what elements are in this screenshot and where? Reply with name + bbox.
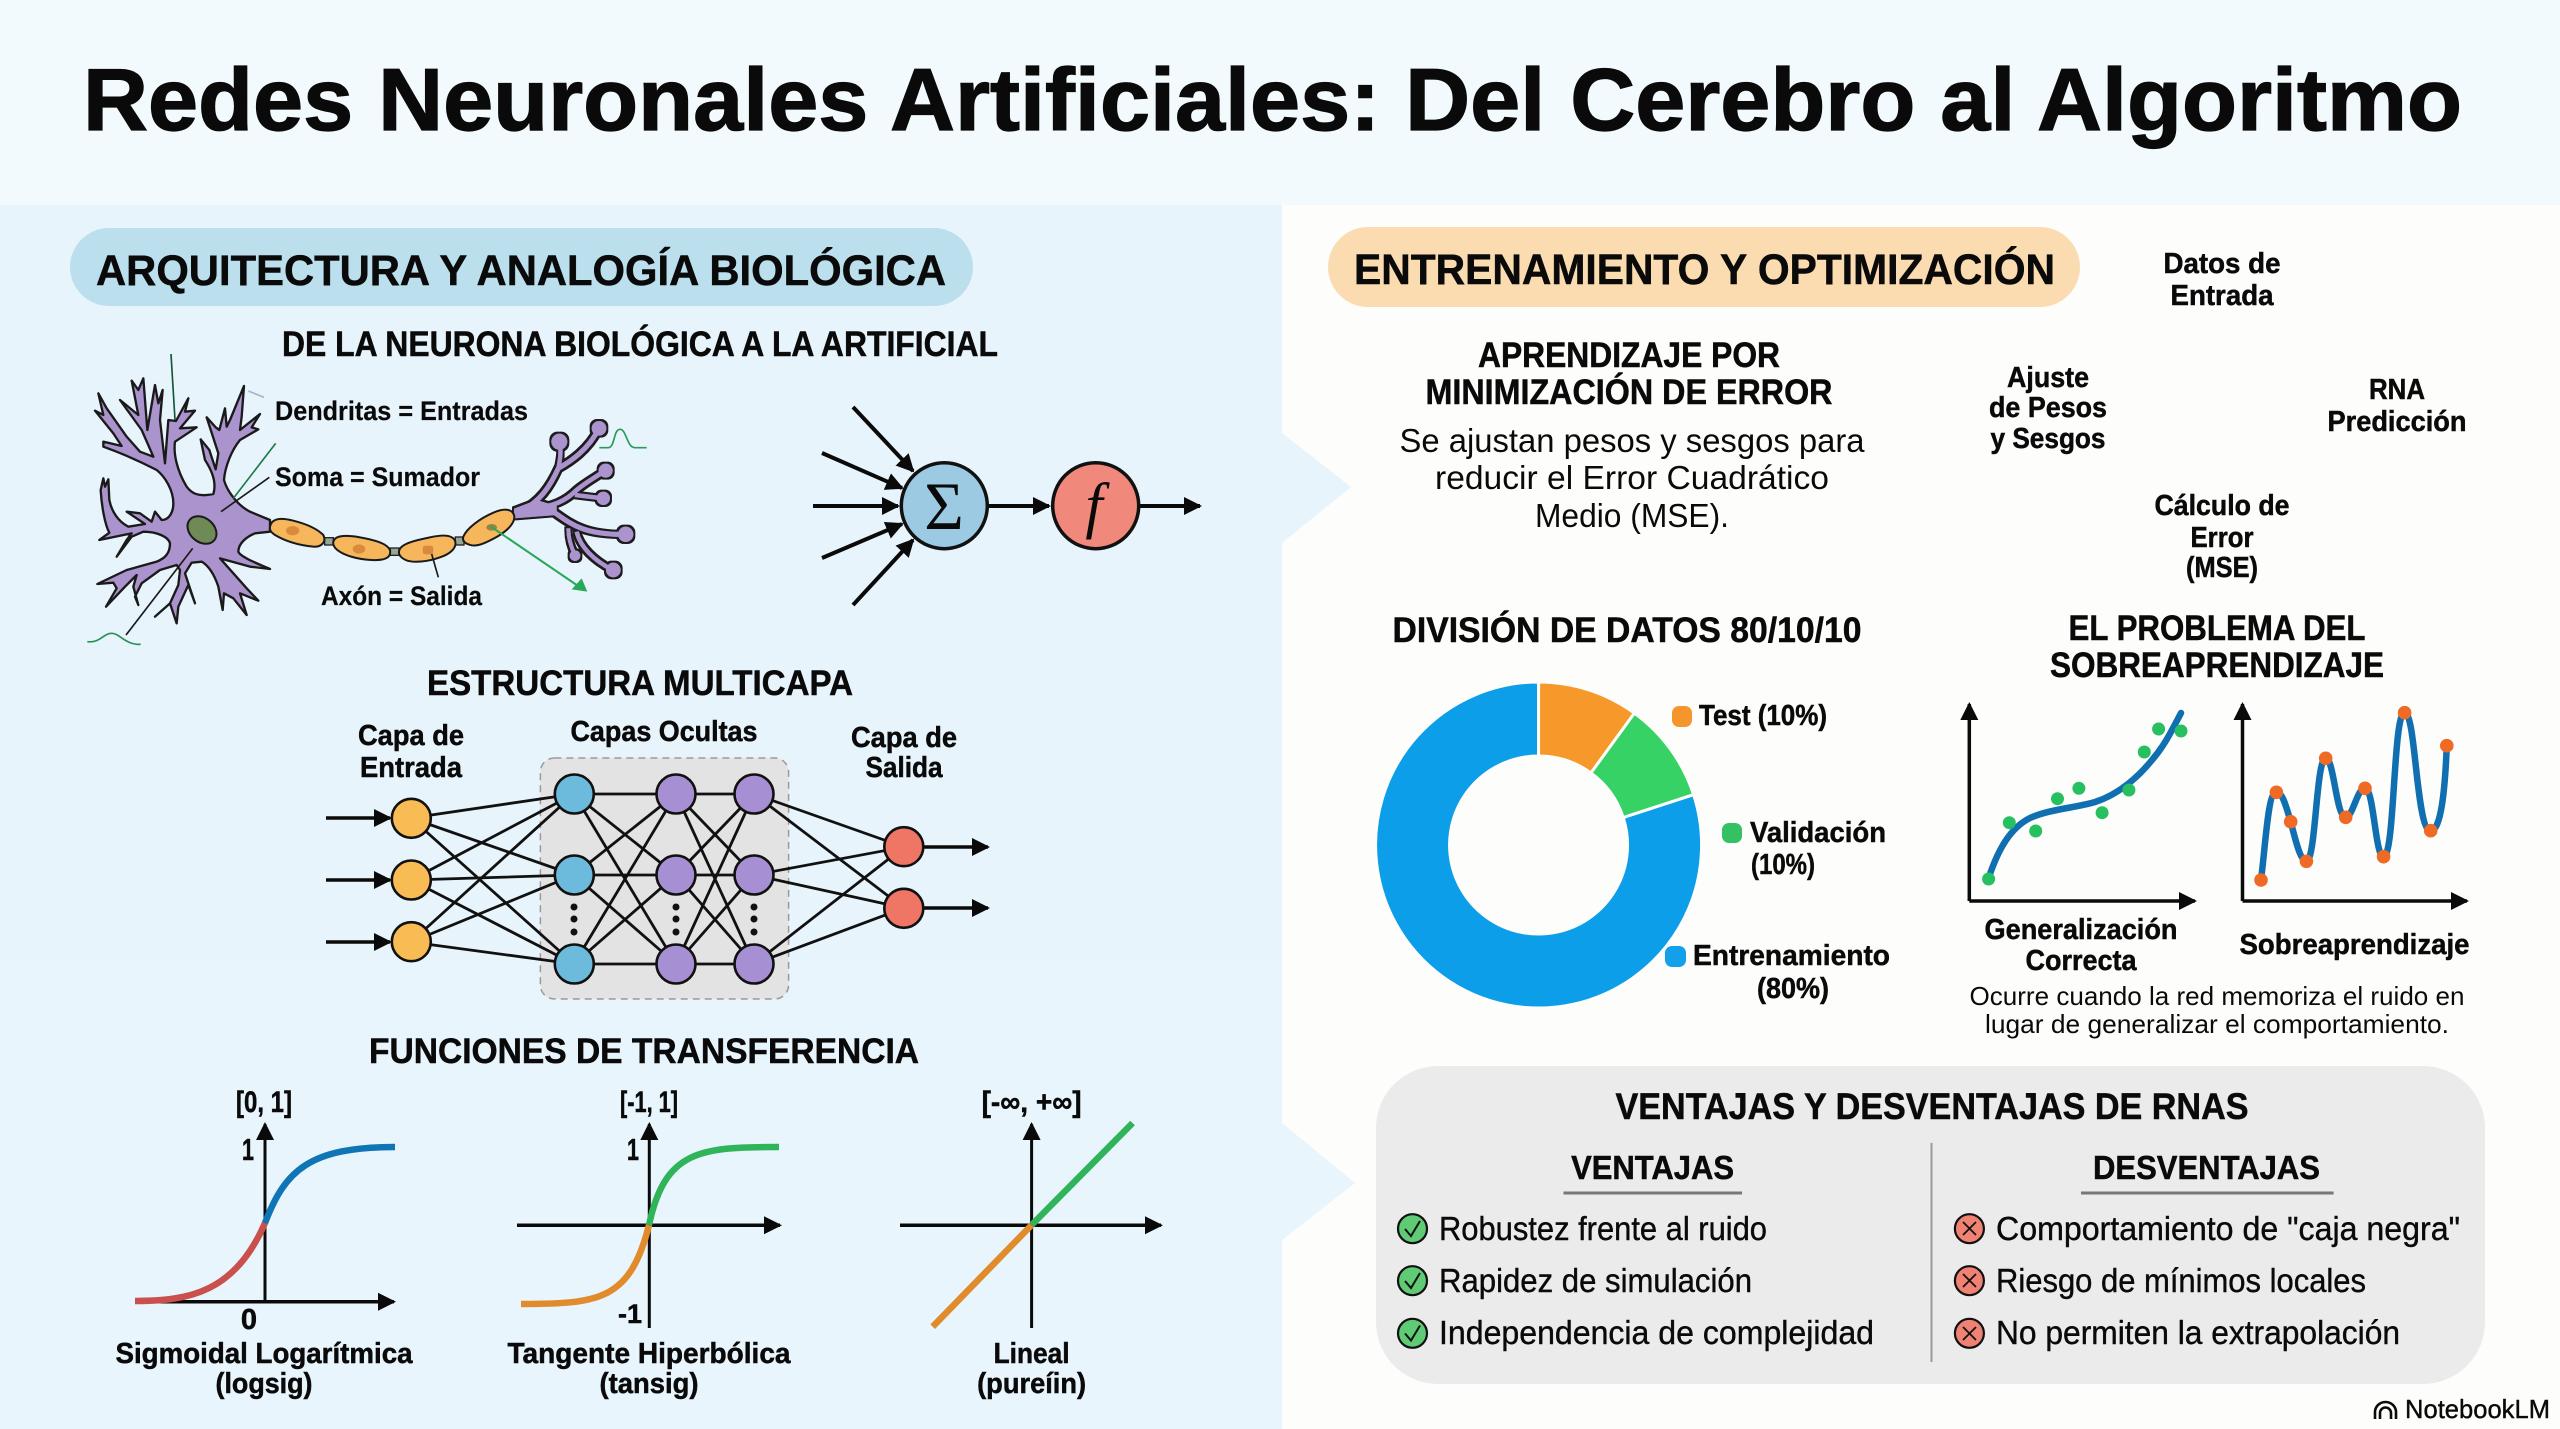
dendrite pointer lines bbox=[87, 354, 276, 644]
logo: NotebookLM: NotebookLM bbox=[2405, 1394, 2550, 1424]
nodes of Ranvier bbox=[325, 537, 464, 555]
artificial neuron diagram: Σ bbox=[924, 468, 964, 544]
training loop labels: Entrada bbox=[2170, 280, 2274, 312]
chart: purelin bbox=[900, 1086, 1161, 1400]
layer labels bbox=[358, 716, 957, 784]
connections bbox=[411, 794, 904, 964]
advantages column: Robustez frente al ruido bbox=[1439, 1210, 1767, 1247]
myelin sheaths bbox=[270, 510, 514, 562]
heading: overfitting: EL PROBLEMA DEL bbox=[2068, 609, 2366, 648]
training loop labels: Cálculo de bbox=[2154, 490, 2290, 522]
title: Redes Neuronales Artificiales: Del Cerebro al Algoritmo bbox=[83, 50, 2462, 149]
heading: neuron: DE LA NEURONA BIOLÓGICA A LA ARTIFICIAL bbox=[282, 324, 998, 364]
disadvantages column bbox=[1955, 1149, 2460, 1351]
legend: training: Entrenamiento bbox=[1693, 940, 1890, 972]
chart: correct generalisation: Correcta bbox=[2026, 945, 2137, 977]
chart: correct generalisation: Generalización bbox=[1984, 914, 2178, 946]
header band bbox=[0, 0, 2560, 205]
layer labels: Salida bbox=[866, 752, 943, 784]
training loop labels: RNA bbox=[2369, 374, 2425, 406]
section pill: architecture: ARQUITECTURA Y ANALOGÍA BIOLÓGICA bbox=[96, 246, 946, 295]
training loop labels: de Pesos bbox=[1989, 392, 2107, 424]
first hidden layer nodes bbox=[555, 774, 594, 984]
other hidden layer nodes bbox=[656, 774, 774, 984]
heading: overfitting bbox=[2050, 609, 2384, 685]
ellipsis dots bbox=[570, 904, 758, 936]
biological neuron illustration: Axón = Salida bbox=[321, 581, 483, 611]
soma and dendrites bbox=[87, 354, 276, 644]
text block: learning by error minimisation: Se ajustan pesos y sesgos para bbox=[1400, 422, 1865, 459]
text block: learning by error minimisation: MINIMIZACIÓN DE ERROR bbox=[1426, 372, 1832, 412]
chart: tansig: -1 bbox=[618, 1299, 642, 1329]
chart: logsig: 0 bbox=[241, 1304, 257, 1336]
advantages column: VENTAJAS bbox=[1571, 1149, 1734, 1186]
section pill: architecture bbox=[70, 228, 973, 306]
chart: overfitting bbox=[2240, 704, 2470, 961]
training loop labels: (MSE) bbox=[2186, 552, 2258, 584]
text block: learning by error minimisation: reducir el Error Cuadrático bbox=[1435, 459, 1829, 496]
text block: learning by error minimisation: Medio (MSE). bbox=[1535, 497, 1729, 534]
chart: purelin: (pureíin) bbox=[977, 1368, 1086, 1400]
chart: tansig: 1 bbox=[627, 1132, 639, 1167]
sheath nuclei bbox=[286, 524, 497, 554]
neuron labels: Dendritas = Entradas bbox=[275, 396, 528, 426]
training loop labels: Error bbox=[2190, 522, 2254, 554]
legend: validation: (10%) bbox=[1751, 849, 1815, 881]
panel: pros and cons bbox=[1376, 1066, 2485, 1384]
panel: left background bbox=[0, 205, 1355, 1429]
section pill: training: ENTRENAMIENTO Y OPTIMIZACIÓN bbox=[1354, 245, 2055, 294]
biological neuron illustration: Soma = Sumador bbox=[275, 462, 480, 492]
chart: tansig bbox=[508, 1086, 791, 1400]
layer labels: Capa de bbox=[358, 720, 464, 752]
chart: tansig: [-1, 1] bbox=[620, 1086, 678, 1119]
training loop labels bbox=[1989, 248, 2466, 584]
chart: purelin: Lineal bbox=[994, 1338, 1070, 1370]
legend: test: Test (10%) bbox=[1699, 700, 1827, 732]
panel heading: VENTAJAS Y DESVENTAJAS DE RNAS bbox=[1616, 1086, 2248, 1127]
hidden layers box bbox=[540, 758, 789, 999]
axon bbox=[270, 421, 647, 592]
chart: overfitting: Sobreaprendizaje bbox=[2240, 929, 2470, 961]
advantages column: Independencia de complejidad bbox=[1439, 1314, 1874, 1351]
heading: transfer functions: FUNCIONES DE TRANSFERENCIA bbox=[369, 1032, 919, 1071]
text block: overfitting note bbox=[1970, 981, 2464, 1039]
activation node bbox=[1053, 463, 1139, 549]
legend: validation bbox=[1722, 817, 1886, 881]
legend: training bbox=[1665, 940, 1890, 1005]
disadvantages column: Comportamiento de "caja negra" bbox=[1996, 1210, 2460, 1247]
advantages column bbox=[1398, 1149, 1874, 1351]
layer labels: Capa de bbox=[851, 722, 957, 754]
biological neuron illustration bbox=[87, 354, 647, 644]
in and out arrows bbox=[326, 818, 988, 942]
chart: logsig: Sigmoidal Logarítmica bbox=[116, 1338, 413, 1370]
training loop labels: y Sesgos bbox=[1990, 423, 2106, 455]
chart: logsig: [0, 1] bbox=[236, 1086, 292, 1119]
advantages column: Rapidez de simulación bbox=[1439, 1262, 1752, 1299]
heading: data split: DIVISIÓN DE DATOS 80/10/10 bbox=[1392, 610, 1862, 650]
multilayer network diagram bbox=[326, 716, 988, 999]
section pill: training bbox=[1328, 227, 2080, 307]
chart: tansig: Tangente Hiperbólica bbox=[508, 1338, 791, 1370]
axon terminal bbox=[514, 421, 633, 577]
text block: overfitting note: Ocurre cuando la red memoriza el ruido en bbox=[1970, 981, 2464, 1011]
disadvantages column: No permiten la extrapolación bbox=[1996, 1314, 2400, 1351]
chart: purelin: [-∞, +∞] bbox=[982, 1086, 1082, 1119]
input nodes bbox=[392, 799, 431, 961]
disadvantages column: Riesgo de mínimos locales bbox=[1996, 1262, 2366, 1299]
artificial neuron diagram: f bbox=[1085, 472, 1110, 540]
text block: overfitting note: lugar de generalizar el comportamiento. bbox=[1985, 1009, 2449, 1039]
heading: overfitting: SOBREAPRENDIZAJE bbox=[2050, 646, 2384, 685]
input arrows bbox=[813, 407, 1200, 605]
chart: tansig: (tansig) bbox=[600, 1368, 698, 1400]
legend: validation: Validación bbox=[1750, 817, 1886, 849]
sum node bbox=[901, 463, 987, 549]
training loop labels: Ajuste bbox=[2007, 362, 2089, 394]
layer labels: Capas Ocultas bbox=[570, 716, 758, 748]
chart: logsig bbox=[116, 1086, 413, 1400]
chart: logsig: (logsig) bbox=[216, 1368, 312, 1400]
heading: multilayer: ESTRUCTURA MULTICAPA bbox=[427, 664, 853, 703]
training loop labels: Datos de bbox=[2164, 248, 2280, 280]
layer labels: Entrada bbox=[360, 752, 463, 784]
legend: training: (80%) bbox=[1757, 973, 1829, 1005]
disadvantages column: DESVENTAJAS bbox=[2093, 1149, 2320, 1186]
chart: correct generalisation bbox=[1969, 704, 2195, 977]
nucleus bbox=[182, 511, 222, 549]
donut chart: data split bbox=[1376, 682, 1890, 1008]
axon pointer lines bbox=[432, 429, 647, 585]
text block: learning by error minimisation bbox=[1400, 336, 1865, 534]
chart: logsig: 1 bbox=[242, 1132, 254, 1167]
artificial neuron diagram bbox=[813, 407, 1200, 605]
text block: learning by error minimisation: APRENDIZAJE POR bbox=[1478, 336, 1780, 375]
training loop labels: Predicción bbox=[2328, 406, 2466, 438]
output nodes bbox=[884, 827, 923, 928]
